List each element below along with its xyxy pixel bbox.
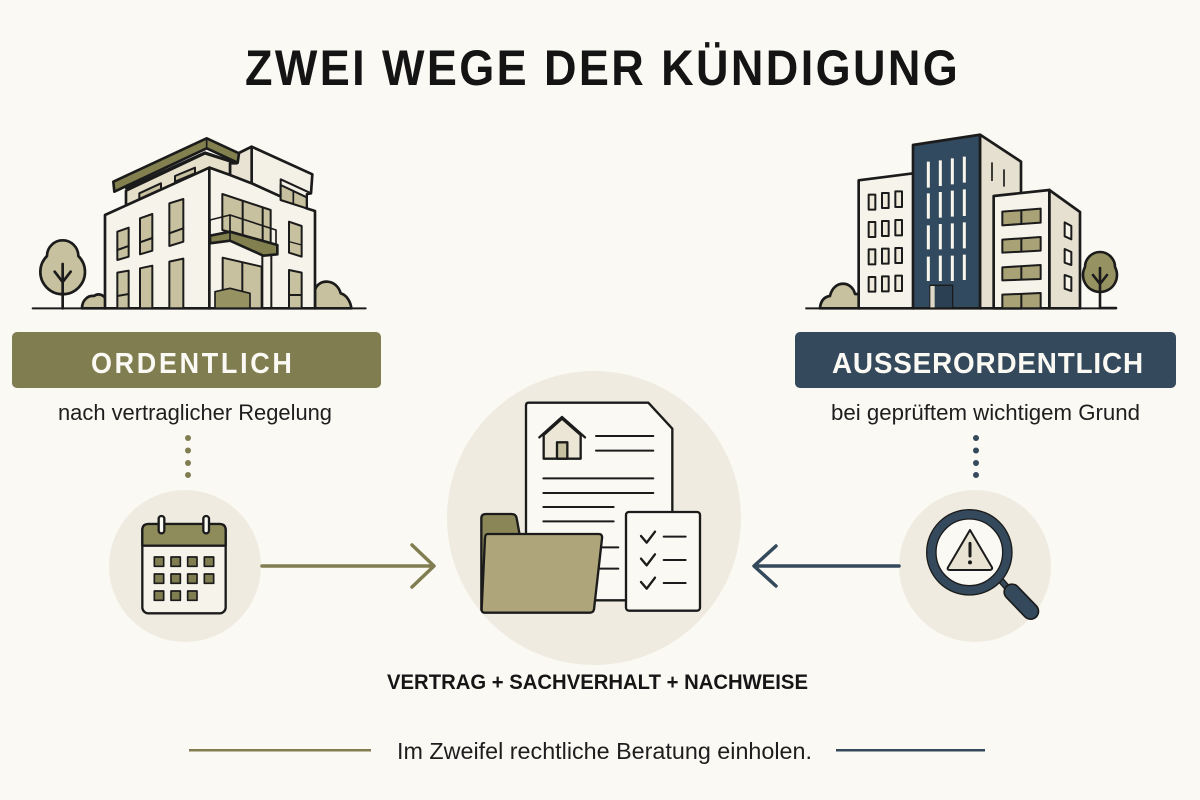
dotted connector left <box>185 435 191 478</box>
right block windows <box>1002 209 1041 308</box>
navy tower <box>913 135 980 308</box>
tree on the right <box>1083 252 1117 308</box>
label: ordentlich: ORDENTLICH <box>91 347 292 379</box>
right bush <box>315 282 351 308</box>
illustration: residential building <box>33 138 366 308</box>
upper right window <box>281 179 311 208</box>
right block <box>1049 190 1080 308</box>
balcony <box>210 215 277 256</box>
footer note: Im Zweifel rechtliche Beratung einholen. <box>397 738 812 764</box>
icon: document, folder and checklist <box>447 371 741 665</box>
upper storey windows <box>139 168 195 199</box>
label: ausserordentlich: AUSSERORDENTLICH <box>832 347 1143 380</box>
icon: calendar <box>109 490 261 642</box>
bush <box>820 284 859 308</box>
upper storey <box>126 153 237 206</box>
left block <box>859 173 913 308</box>
folder <box>481 514 602 613</box>
main walls <box>105 168 209 308</box>
arrow: left to centre <box>262 545 434 587</box>
tower door <box>930 285 953 308</box>
label: ordentlich <box>12 332 381 388</box>
left bush <box>82 294 105 308</box>
icon: magnifier with warning <box>899 490 1051 642</box>
left windows <box>117 199 302 308</box>
balcony glazing <box>222 194 271 243</box>
checklist <box>626 512 700 611</box>
left block windows <box>869 191 902 292</box>
dotted connector right <box>973 435 979 478</box>
subtitle right: bei geprüftem wichtigem Grund <box>831 400 1140 425</box>
tower windows <box>928 157 964 281</box>
side windows <box>1065 222 1071 291</box>
label: ausserordentlich <box>795 332 1176 388</box>
planter <box>215 288 250 308</box>
illustration: office buildings <box>805 135 1117 308</box>
footer rule right <box>836 749 985 752</box>
rear volume <box>230 147 312 209</box>
arrow: right to centre <box>754 546 899 586</box>
caption: documents: VERTRAG + SACHVERHALT + NACHWEISE <box>387 671 808 694</box>
tree <box>40 240 85 308</box>
subtitle left: nach vertraglicher Regelung <box>58 400 332 425</box>
contract sheet <box>526 403 672 600</box>
side of tower <box>980 135 1021 308</box>
entrance <box>223 255 271 308</box>
ground line <box>33 305 366 311</box>
house symbol <box>539 417 585 459</box>
ground line <box>805 305 1117 311</box>
roof slab <box>113 138 239 192</box>
title: ZWEI WEGE DER KÜNDIGUNG <box>245 41 958 97</box>
footer rule left <box>189 749 371 752</box>
